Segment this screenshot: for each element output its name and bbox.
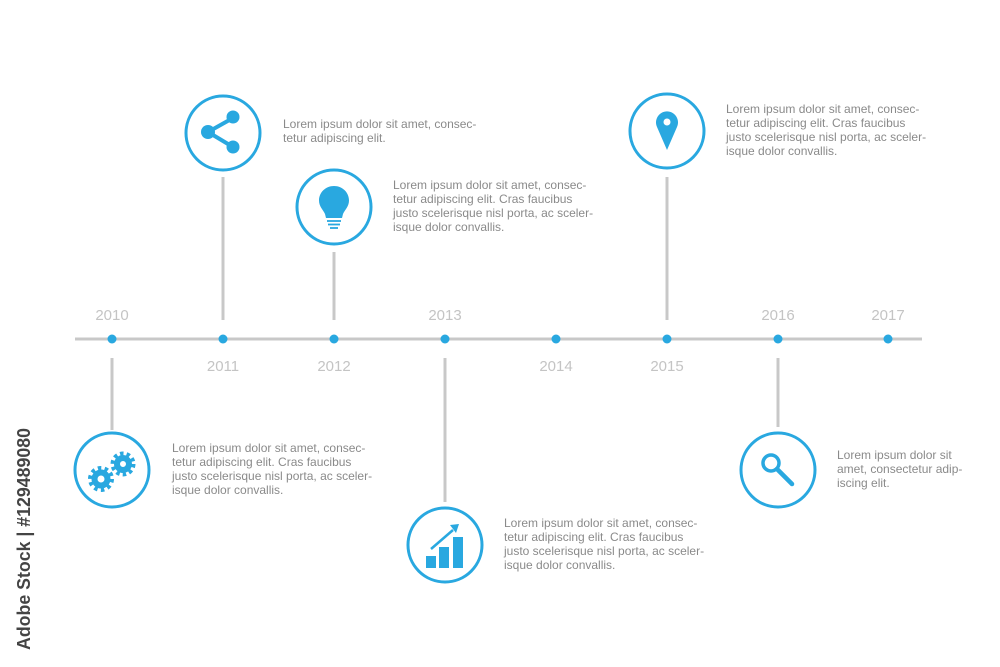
- milestone 2016: search: Lorem ipsum dolor sit: [837, 448, 952, 462]
- milestone 2015: pin: isque dolor convallis.: [726, 144, 837, 158]
- milestone 2012: bulb: justo scelerisque nisl porta, ac sceler-: [392, 206, 593, 220]
- milestone 2011: share: Lorem ipsum dolor sit amet, consec-: [283, 117, 476, 131]
- timeline axis: [75, 334, 922, 344]
- year labels: 2011: [207, 358, 239, 375]
- milestone 2013: chart: [408, 508, 704, 582]
- year labels: 2013: [428, 307, 462, 324]
- year labels: 2016: [761, 307, 795, 324]
- connector stems: [112, 177, 778, 502]
- year labels: 2014: [539, 358, 573, 375]
- milestone 2012: bulb: [297, 170, 593, 244]
- milestone 2013: chart: tetur adipiscing elit. Cras faucibus: [504, 530, 683, 544]
- year labels: [95, 307, 905, 375]
- milestone 2015: pin: tetur adipiscing elit. Cras faucibus: [726, 116, 905, 130]
- milestone 2011: share: tetur adipiscing elit.: [283, 131, 386, 145]
- milestone 2013: chart: justo scelerisque nisl porta, ac sceler-: [503, 544, 704, 558]
- milestone 2010: gears: Lorem ipsum dolor sit amet, consec-: [172, 441, 365, 455]
- milestone 2013: chart: isque dolor convallis.: [504, 558, 615, 572]
- year labels: 2015: [650, 358, 684, 375]
- milestone 2015: pin: Lorem ipsum dolor sit amet, consec-: [726, 102, 919, 116]
- milestone 2012: bulb: tetur adipiscing elit. Cras faucibus: [393, 192, 572, 206]
- milestone 2010: gears: isque dolor convallis.: [172, 483, 283, 497]
- milestone 2015: pin: [630, 94, 926, 168]
- milestone 2013: chart: Lorem ipsum dolor sit amet, consec-: [504, 516, 697, 530]
- milestone 2016: search: amet, consectetur adip-: [837, 462, 962, 476]
- milestone 2016: search: iscing elit.: [837, 476, 890, 490]
- milestone 2015: pin: justo scelerisque nisl porta, ac sceler-: [725, 130, 926, 144]
- milestone 2010: gears: tetur adipiscing elit. Cras faucibus: [172, 455, 351, 469]
- watermark label: Adobe Stock | #129489080: [14, 428, 34, 650]
- year labels: 2017: [871, 307, 905, 324]
- milestone 2012: bulb: isque dolor convallis.: [393, 220, 504, 234]
- year labels: 2012: [317, 358, 351, 375]
- year labels: 2010: [95, 307, 129, 324]
- milestone 2010: gears: [75, 433, 372, 507]
- milestone 2010: gears: justo scelerisque nisl porta, ac sceler-: [171, 469, 372, 483]
- milestone 2011: share: [186, 96, 476, 170]
- milestone 2012: bulb: Lorem ipsum dolor sit amet, consec-: [393, 178, 586, 192]
- milestone 2016: search: [741, 433, 962, 507]
